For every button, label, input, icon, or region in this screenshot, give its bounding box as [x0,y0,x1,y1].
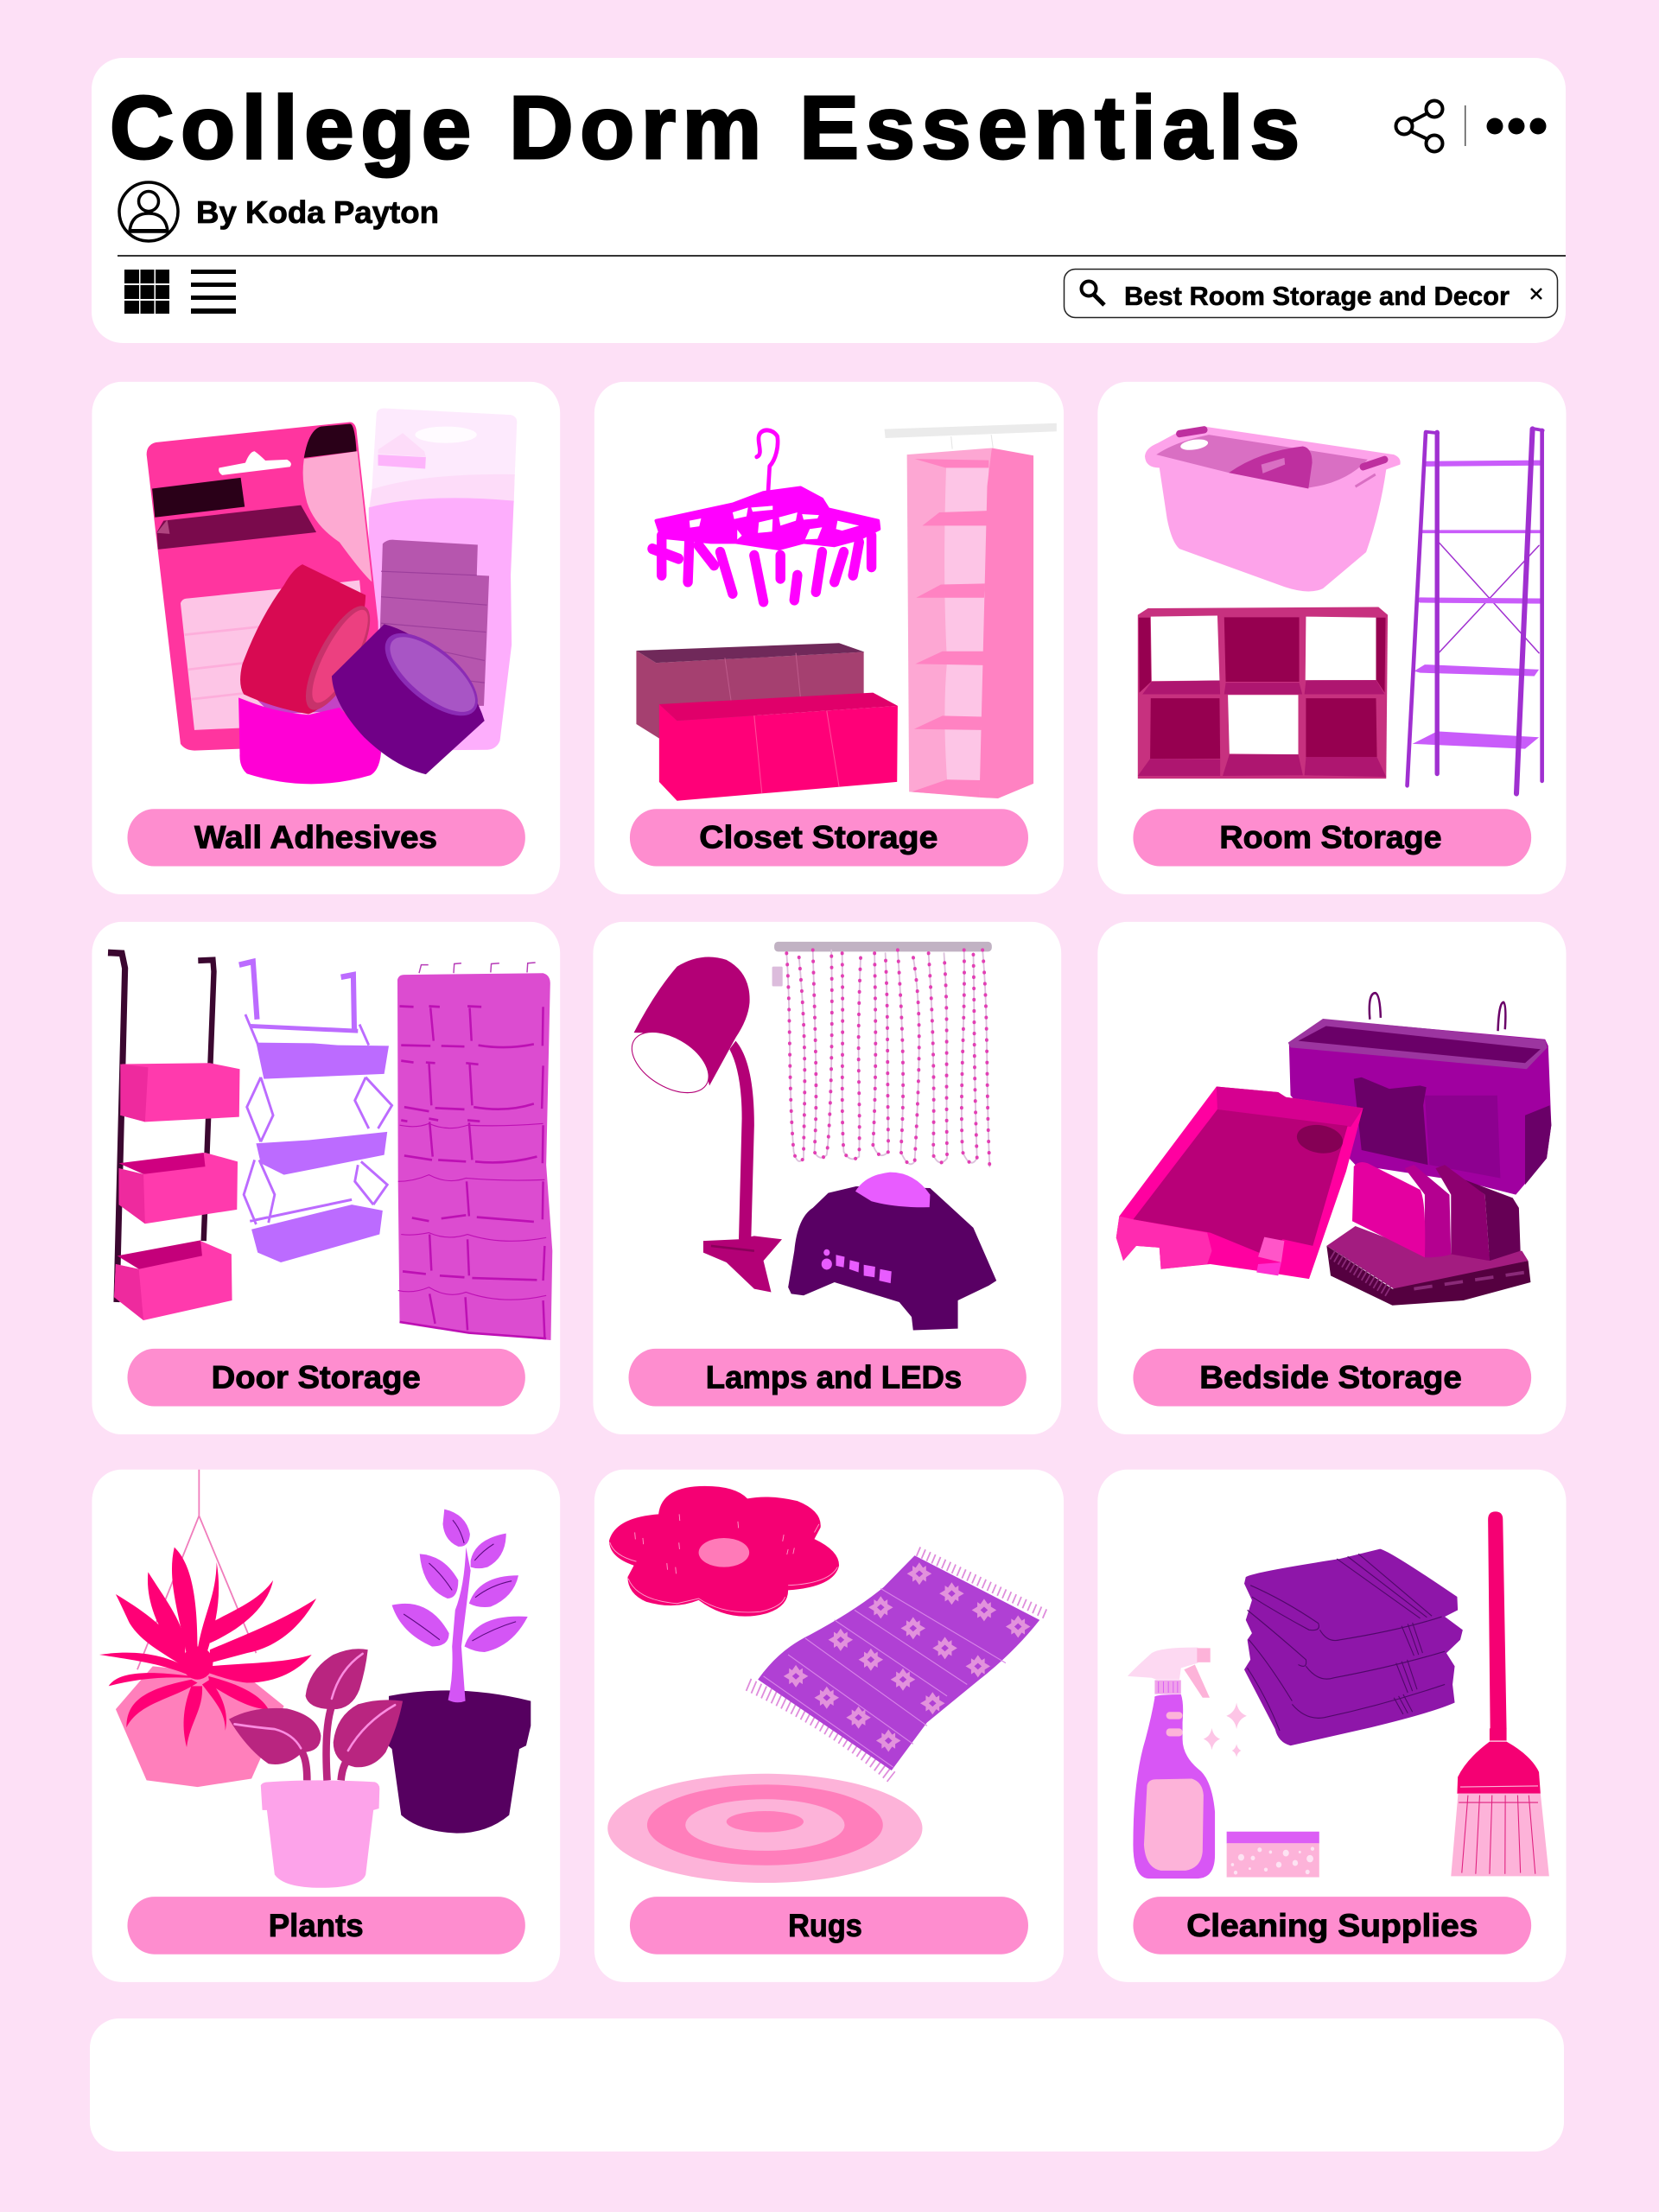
laundry basket [1145,427,1401,591]
panel: door storage [92,922,560,1434]
over-door lilac racks [239,962,392,1262]
clip hanger [652,430,879,601]
hanging closet shelves [907,435,1033,798]
magenta tape roll [238,691,381,784]
flower rug [609,1486,839,1617]
label pill: Door Storage [212,1359,421,1395]
woven purple rug [748,1551,1048,1777]
label pill [1133,1349,1531,1406]
galaxy projector [788,1173,996,1330]
icon: share [1396,100,1443,152]
folded towels [1244,1549,1463,1745]
icon: list view [191,270,236,314]
round striped rug [607,1774,922,1883]
icon: author avatar [119,182,178,241]
spray bottle [1128,1648,1215,1878]
sponge [1227,1832,1319,1878]
hanging spider plant [99,1470,316,1787]
label pill: Bedside Storage [1199,1359,1462,1395]
LED string curtain [772,942,992,1166]
panel: room storage [1097,382,1566,894]
panel: wall adhesives [92,382,560,894]
icon: close [1531,289,1541,299]
label pill [1133,809,1531,866]
closet rod [885,423,1057,438]
sparkles [1204,1703,1247,1758]
title: College Dorm Essentials [110,78,1300,177]
clear adhesive pack [369,409,517,751]
dark pot with lilac plant [388,1510,531,1834]
label pill: Cleaning Supplies [1186,1908,1478,1943]
hanging pink baskets [108,952,239,1320]
charging station [1326,1162,1530,1306]
label pill [1133,1897,1531,1955]
shoe pocket organizer [397,963,552,1340]
label pill: Wall Adhesives [194,819,437,855]
ladder shelf [1408,429,1543,793]
search text: Best Room Storage and Decor [1124,281,1510,311]
label pill [630,809,1028,866]
label pill: Plants [269,1908,364,1943]
panel: plants [92,1470,560,1982]
label pill [127,1897,525,1955]
label pill: Closet Storage [699,819,938,855]
panel: closet storage [594,382,1064,894]
panel: bedside storage [1097,922,1566,1434]
bedside caddy [1288,993,1551,1195]
divider [118,255,1566,257]
label pill [628,1349,1027,1406]
label pill [630,1897,1028,1955]
label pill: Rugs [788,1908,862,1943]
small pink pot with leaves [229,1649,403,1888]
back under-bed bin [636,643,864,739]
front under-bed bin [659,693,898,801]
bed tray [1116,1086,1363,1279]
label pill [127,809,525,866]
panel: lamps and LEDs [593,922,1061,1434]
red tape roll [240,564,382,719]
icon: magnifier [1082,282,1104,305]
label pill [127,1349,525,1406]
desk lamp [623,957,782,1292]
author byline: By Koda Payton [196,194,439,230]
panel: cleaning supplies [1097,1470,1566,1982]
panel: header [92,58,1566,343]
search box [1065,270,1557,318]
icon: grid view [124,270,169,314]
pink adhesive card [147,423,381,751]
label pill: Lamps and LEDs [706,1359,962,1395]
broom [1451,1511,1549,1876]
purple tape roll [332,618,490,774]
icon: more dots [1486,118,1547,135]
label pill: Room Storage [1219,819,1442,855]
cube organizer [1138,607,1388,779]
panel: empty footer [90,2018,1564,2152]
panel: rugs [594,1470,1064,1982]
